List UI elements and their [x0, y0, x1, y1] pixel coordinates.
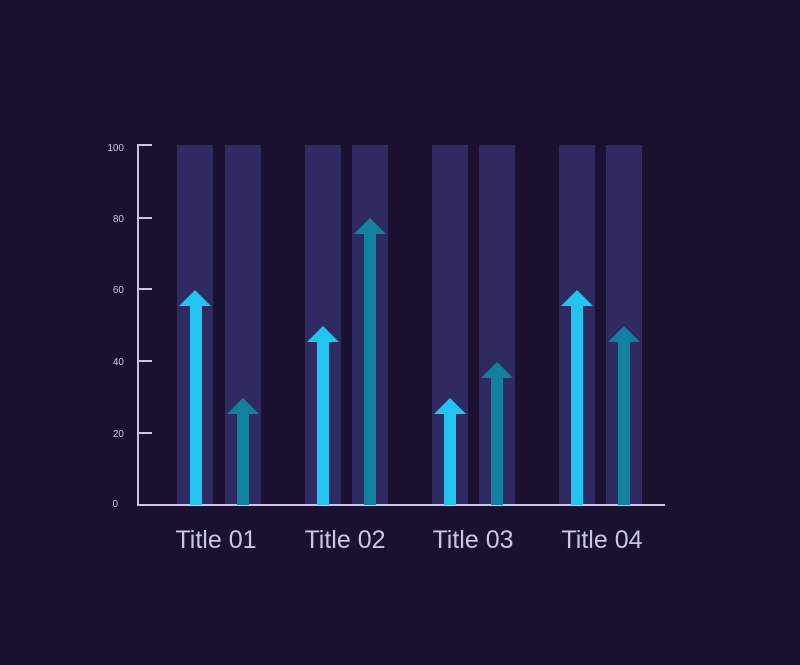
arrow 3b — [481, 362, 513, 505]
y axis labels: 40 — [113, 357, 124, 368]
arrow 3a — [434, 398, 466, 505]
y axis labels: 0 — [112, 499, 118, 510]
arrow 1a — [179, 290, 211, 505]
arrow 4b — [608, 326, 640, 505]
arrow 2a — [307, 326, 339, 505]
arrow 2b — [354, 218, 386, 505]
y axis labels: 60 — [113, 285, 124, 296]
arrow 1b — [227, 398, 259, 505]
y axis labels: 100 — [107, 143, 124, 154]
category labels: Title 01 — [175, 526, 257, 554]
arrow 4a — [561, 290, 593, 505]
y axis labels: 80 — [113, 214, 124, 225]
category labels — [175, 526, 643, 554]
bar backgrounds — [177, 145, 642, 505]
category labels: Title 02 — [304, 526, 386, 554]
y axis labels: 20 — [113, 429, 124, 440]
category labels: Title 04 — [561, 526, 643, 554]
y axis labels — [107, 143, 124, 510]
category labels: Title 03 — [432, 526, 514, 554]
axes — [138, 145, 665, 505]
